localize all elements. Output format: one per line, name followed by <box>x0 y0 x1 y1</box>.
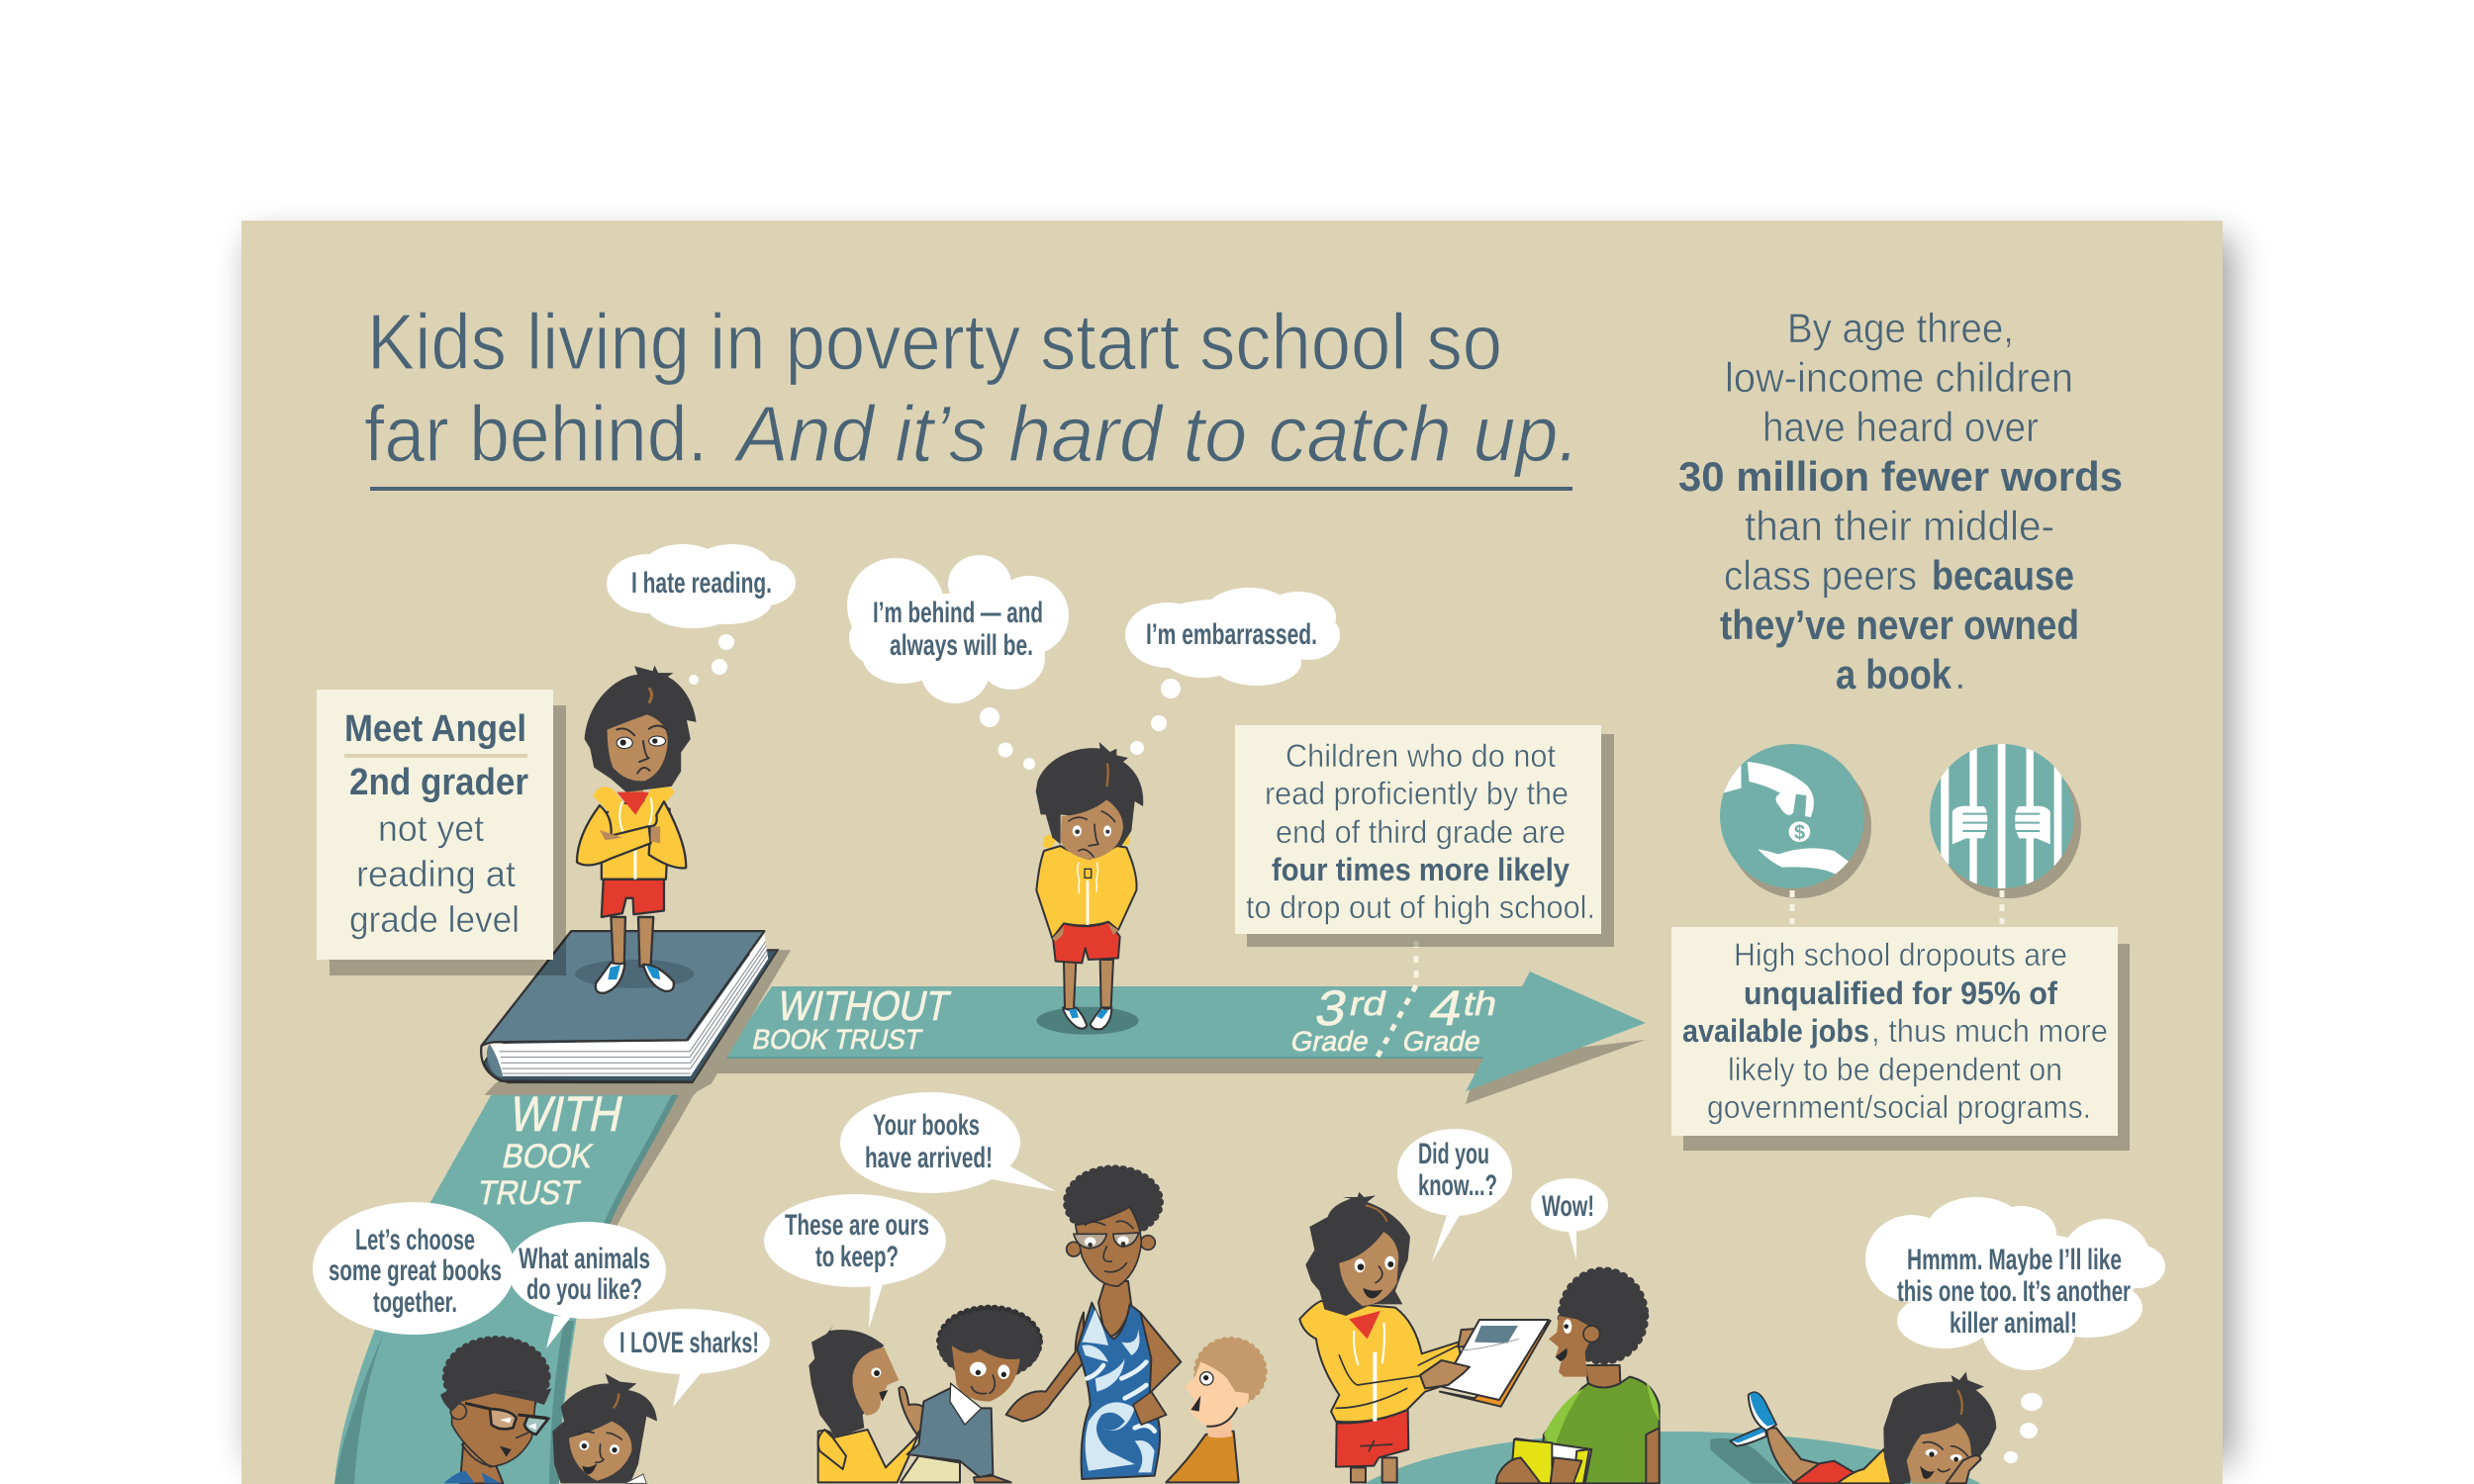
thought bubble: Hmmm <box>1865 1197 2165 1463</box>
callout: high school dropouts: government/social programs. <box>1707 1089 2091 1125</box>
text block: 30 million fewer words <box>1678 305 2123 697</box>
thought bubble: I hate reading <box>607 544 796 685</box>
icon: book <box>481 931 791 1095</box>
speech bubble: Did you know: Did you <box>1418 1138 1489 1170</box>
icon: hands on prison bars <box>1930 742 2081 924</box>
text block: 30 million fewer words: a book <box>1836 651 1952 697</box>
title <box>364 298 1579 491</box>
thought bubble: I'm behind <box>847 555 1069 770</box>
speech bubble: Your books have arrived: Your books <box>873 1109 980 1142</box>
hoodie <box>1299 1301 1465 1422</box>
callout: Meet Angel <box>317 690 566 975</box>
speech bubble: Wow <box>1531 1178 1608 1259</box>
arrow: without Book Trust: 4 <box>1425 980 1469 1036</box>
characters: teacher delivering books to children <box>809 1169 1264 1482</box>
callout: Meet Angel: reading at <box>356 854 517 894</box>
callout: third grade statistic: Children who do not <box>1285 738 1556 774</box>
callout: high school dropouts: likely to be dependent on <box>1728 1052 2062 1087</box>
arrow: without Book Trust: 3 <box>1311 980 1353 1036</box>
text block: 30 million fewer words: class peers <box>1724 552 1917 599</box>
characters: Angel showing a book to a friend <box>1299 1192 1660 1483</box>
text block: 30 million fewer words: By age three, <box>1787 305 2014 351</box>
speech bubble: Let's choose: Let’s choose <box>355 1224 475 1256</box>
text block: 30 million fewer words: they’ve never owned <box>1720 602 2079 648</box>
character: Angel looking down, hands in pockets <box>1036 742 1143 1035</box>
icon: hand giving coin: $ <box>1794 822 1805 844</box>
arrow: without Book Trust: rd <box>1346 985 1389 1023</box>
callout: Meet Angel: 2nd grader <box>349 762 528 803</box>
hair and face <box>1305 1192 1410 1316</box>
arrow: with Book Trust: TRUST <box>474 1174 583 1212</box>
characters: mentor and Angel choosing books <box>440 1340 657 1483</box>
text block: 30 million fewer words: . <box>1954 651 1966 697</box>
blonde boy <box>1166 1432 1239 1482</box>
callout: high school dropouts: , thus much more <box>1871 1013 2108 1049</box>
speech bubble: What animals: What animals <box>519 1243 650 1275</box>
callout: high school dropouts <box>1671 927 2130 1151</box>
Angel side view <box>818 1430 918 1482</box>
callout: third grade statistic: read proficiently by the <box>1265 776 1569 811</box>
icon: hand giving coin <box>1716 744 1871 924</box>
callout: third grade statistic: four times more likely <box>1272 852 1570 887</box>
character: Angel standing on book, arms crossed <box>575 665 696 993</box>
speech bubble: Let's choose <box>313 1202 515 1335</box>
speech bubble: What animals: do you like? <box>526 1273 642 1306</box>
callout: third grade statistic: to drop out of high school. <box>1246 889 1595 925</box>
mentor hair <box>446 1340 546 1414</box>
speech bubble: These are ours: to keep? <box>815 1241 899 1273</box>
arrow: with Book Trust: BOOK <box>499 1138 596 1175</box>
text block: 30 million fewer words: because <box>1932 552 2074 599</box>
callout: Meet Angel: grade level <box>349 899 520 940</box>
Angel reading <box>552 1373 657 1483</box>
text block: 30 million fewer words: than their middle- <box>1745 503 2054 549</box>
text block: 30 million fewer words: 30 million fewer words <box>1678 453 2123 500</box>
thought bubble: I'm behind: always will be. <box>890 629 1033 662</box>
callout: high school dropouts: available jobs <box>1682 1013 1869 1049</box>
text block: 30 million fewer words: have heard over <box>1762 404 2039 450</box>
arrow: without Book Trust <box>709 941 1646 1104</box>
title: Kids living in poverty start school so <box>367 298 1502 386</box>
thought bubble: Hmmm: Hmmm. Maybe I’ll like <box>1907 1244 2122 1276</box>
thought bubble: I'm embarrassed: I’m embarrassed. <box>1146 618 1317 651</box>
thought bubble: I'm embarrassed <box>1125 588 1340 755</box>
arrow: without Book Trust: BOOK TRUST <box>750 1023 924 1055</box>
callout: third grade statistic: end of third grade are <box>1276 814 1566 850</box>
arrow: with Book Trust <box>334 1083 705 1484</box>
title: far behind. <box>364 390 708 478</box>
teacher <box>1006 1313 1084 1422</box>
arrow: without Book Trust: Grade <box>1288 1025 1372 1057</box>
arrow: without Book Trust: WITHOUT <box>774 982 954 1029</box>
legs and shorts <box>1351 1457 1397 1482</box>
thought bubble: I'm behind: I’m behind — and <box>873 597 1043 629</box>
speech bubble: Did you know <box>1397 1129 1512 1261</box>
speech bubble: Wow: Wow! <box>1542 1190 1594 1223</box>
callout: Meet Angel: Meet Angel <box>344 708 526 750</box>
arrow: with Book Trust: WITH <box>506 1086 628 1142</box>
arrow: without Book Trust: Grade <box>1400 1025 1483 1057</box>
text block: 30 million fewer words: low-income children <box>1725 354 2073 401</box>
boy in green <box>1541 1377 1660 1483</box>
thought bubble: Hmmm: this one too. It’s another <box>1897 1275 2131 1308</box>
speech bubble: Let's choose: some great books <box>329 1254 502 1287</box>
boy in sweater <box>901 1456 960 1482</box>
callout: Meet Angel: not yet <box>378 808 485 849</box>
open book <box>1440 1321 1551 1407</box>
ground: teal oval <box>1364 1432 1981 1484</box>
panel: tan background <box>241 221 2223 1484</box>
callout: third grade statistic <box>1235 725 1614 947</box>
speech bubble: Your books have arrived <box>840 1092 1056 1193</box>
speech bubble: I LOVE sharks <box>604 1309 770 1407</box>
speech bubble: I LOVE sharks: I LOVE sharks! <box>619 1327 759 1359</box>
arrow: without Book Trust: th <box>1460 985 1500 1023</box>
speech bubble: What animals <box>508 1222 666 1348</box>
callout: high school dropouts: unqualified for 95% of <box>1744 975 2057 1011</box>
speech bubble: Your books have arrived: have arrived! <box>865 1142 993 1174</box>
speech bubble: Did you know: know...? <box>1418 1169 1497 1202</box>
title: And it’s hard to catch up. <box>733 390 1579 478</box>
speech bubble: Let's choose: together. <box>373 1286 457 1319</box>
callout: high school dropouts: High school dropouts are <box>1734 937 2067 973</box>
speech bubble: These are ours <box>764 1194 946 1329</box>
character: Angel lying on her stomach reading <box>1710 1372 1996 1483</box>
thought bubble: I hate reading: I hate reading. <box>631 567 772 600</box>
thought bubble: Hmmm: killer animal! <box>1950 1307 2077 1340</box>
speech bubble: These are ours: These are ours <box>785 1209 929 1242</box>
carried yellow book <box>1511 1438 1591 1483</box>
